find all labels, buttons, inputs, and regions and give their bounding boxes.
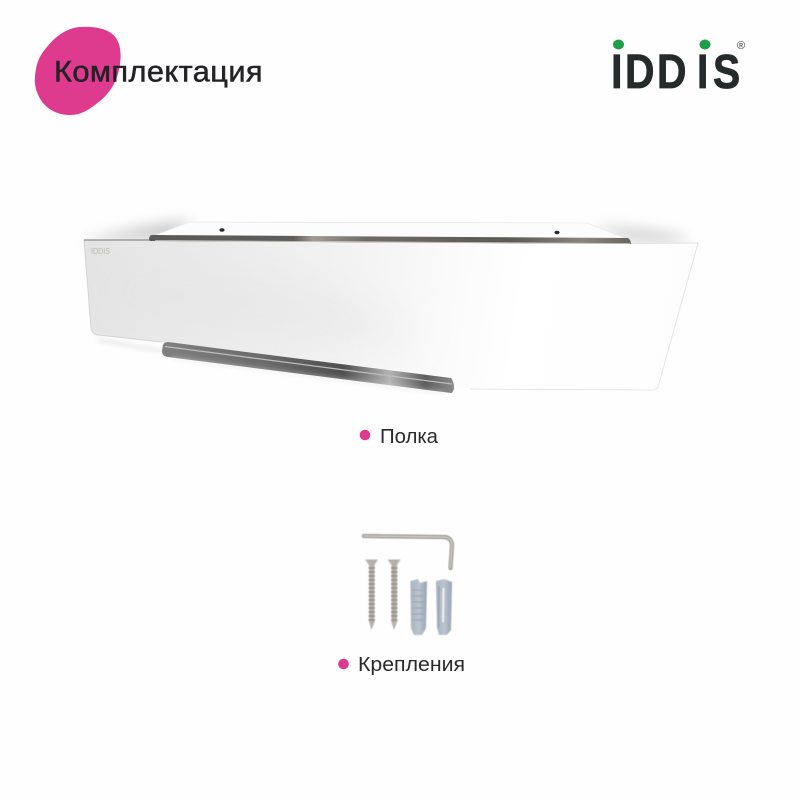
bullet: [338, 659, 349, 669]
wall plug right: [436, 579, 452, 635]
label: Полка: [360, 426, 439, 448]
label: Крепления: [338, 654, 465, 676]
pink blob: [35, 27, 121, 115]
fasteners set: [364, 536, 452, 635]
wall plug left: [410, 579, 427, 635]
shelf: [84, 220, 699, 393]
engraved brand on shelf: IDDIS: [91, 246, 110, 256]
face outlines: [84, 240, 162, 342]
label text: Крепления: [358, 654, 465, 676]
shelf shadow: [86, 220, 690, 352]
mounting holes: [219, 228, 560, 234]
bullet: [360, 430, 370, 440]
screw left: [365, 560, 378, 630]
logo registered mark: ®: [737, 40, 745, 52]
soft reflection on face: [110, 270, 420, 338]
logo: IDDIS: [611, 40, 745, 99]
front chrome bar: [162, 342, 454, 393]
rear chrome rail: [149, 235, 631, 244]
logo green dots: [613, 40, 710, 50]
screw right: [388, 560, 400, 630]
logo letters: IDDIS: [611, 46, 740, 99]
allen key: [364, 536, 452, 568]
label text: Полка: [380, 426, 439, 448]
heading: Комплектация: [35, 27, 263, 115]
shelf front face: [84, 240, 699, 390]
heading text: Комплектация: [54, 56, 263, 88]
shelf top surface: [150, 222, 630, 240]
